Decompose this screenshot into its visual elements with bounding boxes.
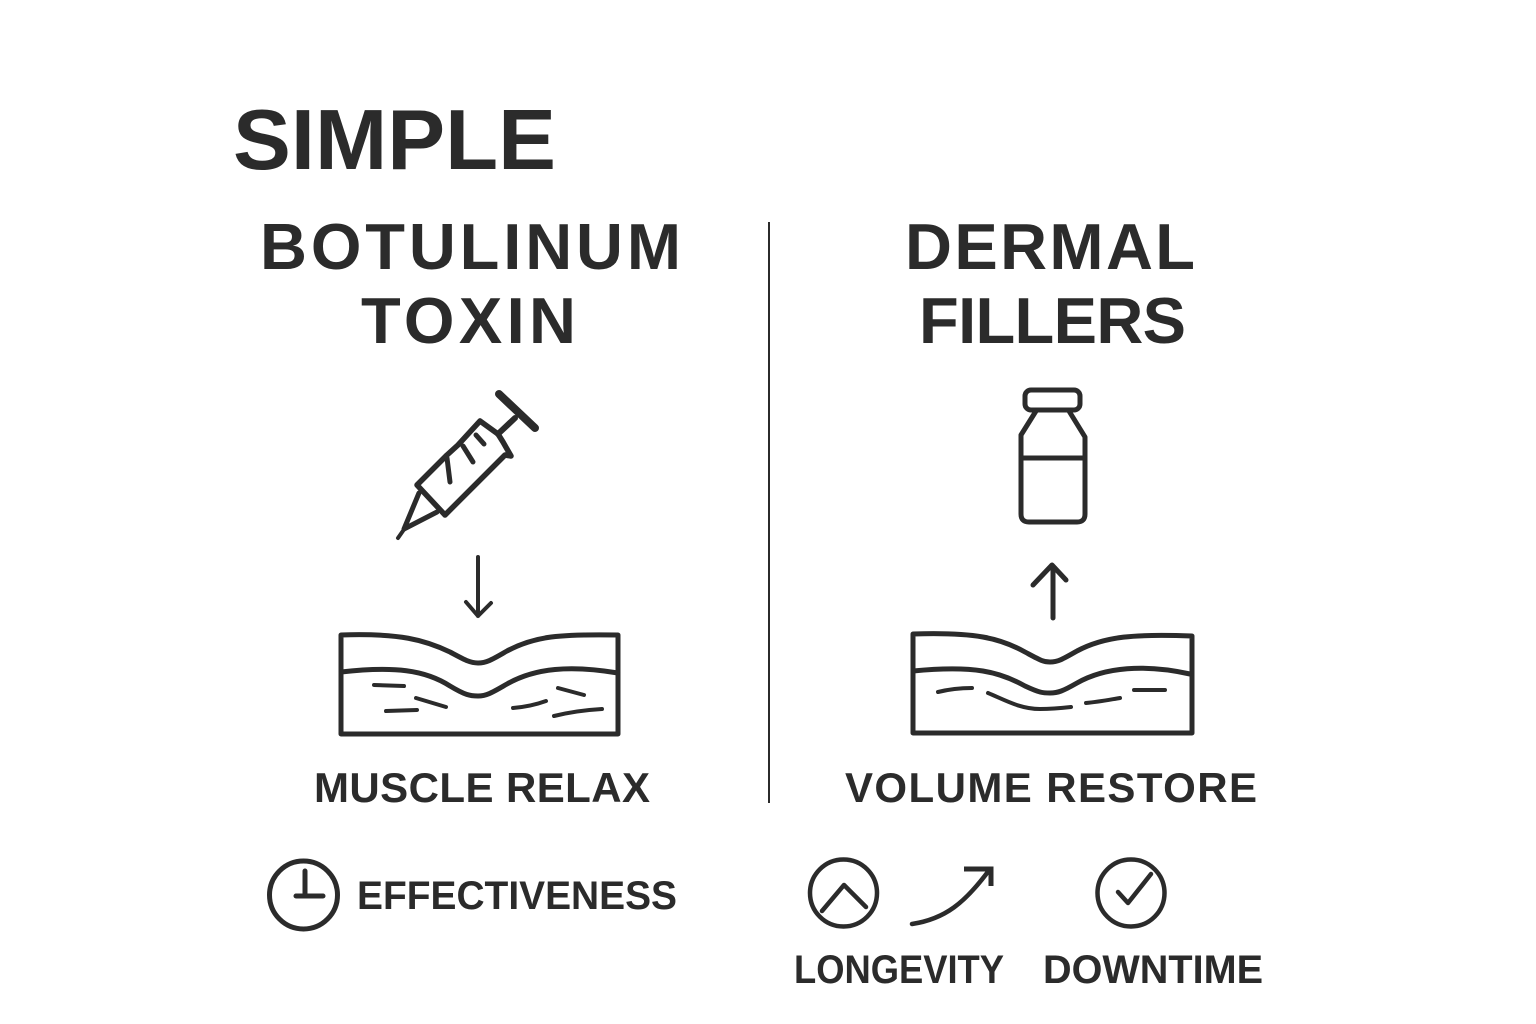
icon: chevron in circle xyxy=(810,860,877,926)
heading: botulinum toxin: TOXIN xyxy=(361,284,576,357)
icon: check in circle xyxy=(1098,860,1164,926)
heading: dermal fillers: DERMAL xyxy=(905,210,1195,283)
label: longevity: LONGEVITY xyxy=(794,948,1004,992)
icon: rising arrow xyxy=(912,869,991,924)
label: volume restore: VOLUME RESTORE xyxy=(845,764,1257,811)
center divider xyxy=(768,222,770,803)
icon: clock xyxy=(270,861,338,929)
heading: dermal fillers xyxy=(905,210,1195,357)
heading: botulinum toxin: BOTULINUM xyxy=(260,210,681,283)
icon: skin cross-section restored xyxy=(913,634,1192,733)
panel: dermal fillers xyxy=(794,210,1263,992)
label: effectiveness: EFFECTIVENESS xyxy=(357,874,677,918)
heading: dermal fillers: FILLERS xyxy=(919,284,1186,357)
arrow: up xyxy=(1033,565,1066,618)
icon: vial xyxy=(1021,390,1085,522)
label: muscle relax: MUSCLE RELAX xyxy=(314,764,650,811)
icon: skin cross-section relaxed xyxy=(341,635,618,734)
title: SIMPLE xyxy=(233,93,556,188)
icon: syringe xyxy=(398,394,535,538)
arrow: down xyxy=(466,557,491,616)
heading: botulinum toxin xyxy=(260,210,681,357)
label: downtime: DOWNTIME xyxy=(1043,948,1263,992)
panel: botulinum toxin xyxy=(260,210,681,929)
